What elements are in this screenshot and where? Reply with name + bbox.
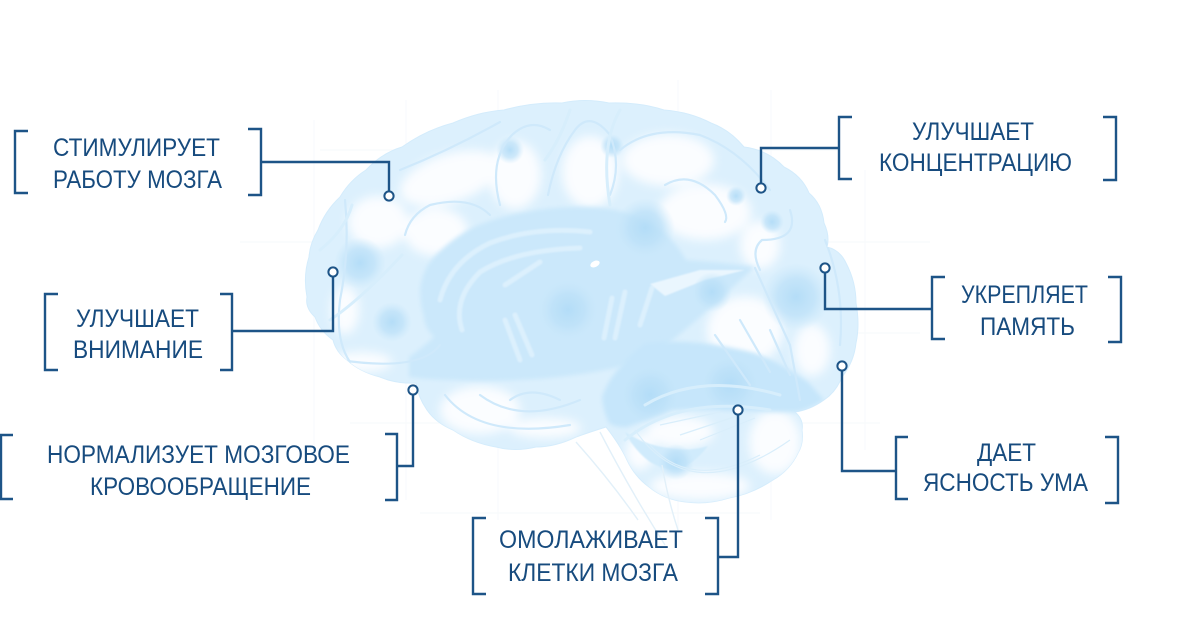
callout: стимулирует работу мозга: СТИМУЛИРУЕТ [53, 134, 220, 162]
brain silhouette [305, 100, 858, 503]
background grid [240, 80, 930, 540]
callout: нормализует мозговое кровообращение [1, 385, 418, 501]
callout: укрепляет память: ПАМЯТЬ [980, 313, 1075, 341]
lower tract [602, 342, 824, 427]
callout: стимулирует работу мозга [15, 129, 394, 201]
brain stem lines [576, 432, 678, 545]
dark spots [334, 134, 830, 480]
callout: улучшает концентрацию: КОНЦЕНТРАЦИЮ [879, 149, 1072, 177]
inner cortex and shading [320, 110, 841, 500]
cerebellum inner ring [626, 434, 707, 466]
sulci lines [339, 121, 841, 429]
callout: омолаживает клетки мозга: ОМОЛАЖИВАЕТ [499, 526, 683, 554]
callout: дает ясность ума: ДАЕТ [977, 439, 1036, 467]
callout: укрепляет память: УКРЕПЛЯЕТ [961, 281, 1088, 309]
callout: нормализует мозговое кровообращение: КРОВООБРАЩЕНИЕ [90, 473, 311, 501]
callout: нормализует мозговое кровообращение: НОРМАЛИЗУЕТ МОЗГОВОЕ [47, 441, 350, 469]
callout: дает ясность ума [837, 361, 1118, 503]
callout: омолаживает клетки мозга: КЛЕТКИ МОЗГА [508, 559, 678, 587]
callout: улучшает концентрацию [756, 117, 1116, 193]
callout: омолаживает клетки мозга [473, 405, 743, 594]
light lobes [331, 134, 830, 500]
brain illustration [305, 100, 858, 545]
limbic mass [409, 207, 755, 381]
cerebellum fibers [635, 412, 790, 473]
callout: улучшает внимание [45, 267, 338, 370]
callout: дает ясность ума: ЯСНОСТЬ УМА [923, 469, 1088, 497]
light highlights in limbic [440, 230, 652, 360]
callout: стимулирует работу мозга: РАБОТУ МОЗГА [53, 166, 222, 194]
callout: укрепляет память [820, 263, 1121, 342]
callout: улучшает внимание: УЛУЧШАЕТ [76, 305, 199, 333]
callout: улучшает внимание: ВНИМАНИЕ [73, 336, 203, 364]
callout: улучшает концентрацию: УЛУЧШАЕТ [912, 118, 1034, 146]
